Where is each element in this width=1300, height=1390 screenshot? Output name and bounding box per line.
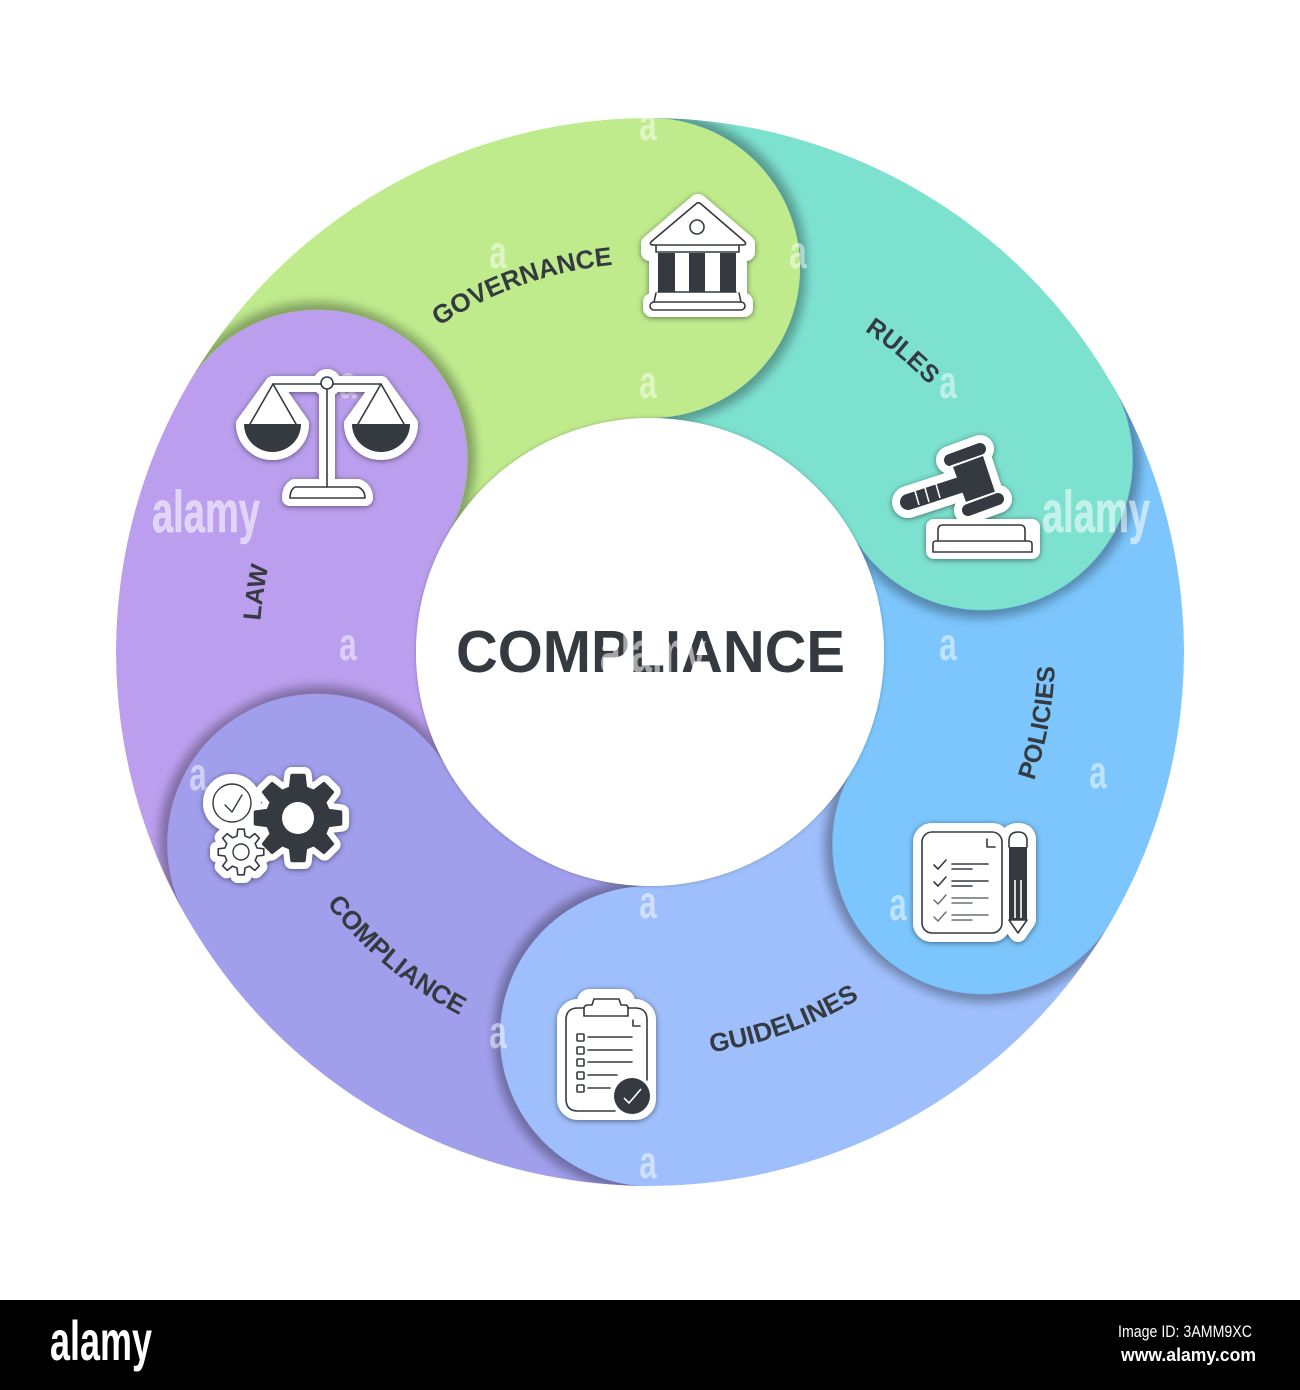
small watermark marks: [189, 99, 1108, 1189]
small watermark marks: a: [189, 749, 208, 801]
small watermark marks: a: [1089, 747, 1108, 799]
small watermark marks: a: [489, 227, 508, 279]
watermark: alamy over title: alamy: [600, 620, 706, 685]
segment body: governance: [188, 118, 650, 535]
icon: gears (compliance): [210, 774, 342, 876]
label: governance: GOVERNANCE: [433, 247, 612, 323]
segment body: guidelines: [650, 769, 1112, 1186]
footer logo: alamy: alamy: [50, 1309, 152, 1372]
small watermark marks: a: [339, 619, 358, 671]
label: rules: RULES: [866, 318, 939, 382]
icon: bank building (governance): [650, 203, 746, 310]
small watermark marks: a: [489, 1007, 508, 1059]
small watermark marks: a: [639, 99, 658, 151]
small watermark marks: a: [639, 1137, 658, 1189]
segment rounded heads with shadows: [154, 118, 1146, 1186]
small watermark marks: a: [639, 877, 658, 929]
small watermark marks: a: [639, 357, 658, 409]
segment body: compliance: [188, 770, 648, 1186]
segment head: rules: [852, 384, 1146, 624]
label: compliance: COMPLIANCE: [330, 896, 467, 1015]
footer bar: [0, 1300, 1300, 1390]
small watermark marks: a: [939, 357, 958, 409]
segment head: governance: [650, 118, 812, 423]
cycle ring: six segments: [116, 118, 1184, 1186]
centre white circle: [416, 418, 884, 886]
title: centre: COMPLIANCE: [456, 619, 845, 685]
icon: gavel (rules): [908, 449, 1032, 552]
segment head: policies: [818, 768, 1113, 1008]
watermark: alamy left: alamy: [152, 480, 260, 545]
segment head: law: [187, 296, 482, 536]
small watermark marks: a: [789, 227, 808, 279]
segment bodies: [116, 118, 1184, 1186]
segment head: compliance: [154, 680, 448, 920]
small watermark marks: a: [889, 879, 908, 931]
segment body: law: [116, 386, 448, 918]
segment head: guidelines: [488, 881, 650, 1186]
footer url: www.alamy.com: [1120, 1345, 1256, 1365]
small watermark marks: a: [939, 619, 958, 671]
segment body: rules: [652, 118, 1112, 534]
small watermark marks: a: [339, 357, 358, 409]
label: guidelines: GUIDELINES: [710, 986, 857, 1052]
label: policies: POLICIES: [1018, 667, 1055, 780]
footer image id: Image ID: 3AMM9XC: [1118, 1322, 1252, 1341]
label: law: LAW: [243, 563, 268, 620]
watermark: alamy right: alamy: [1042, 480, 1150, 545]
segment body: policies: [852, 386, 1184, 918]
icon: clipboard check (guidelines): [566, 998, 650, 1114]
icon: scales (law): [244, 377, 410, 498]
icon: checklist and pencil (policies): [922, 832, 1027, 933]
